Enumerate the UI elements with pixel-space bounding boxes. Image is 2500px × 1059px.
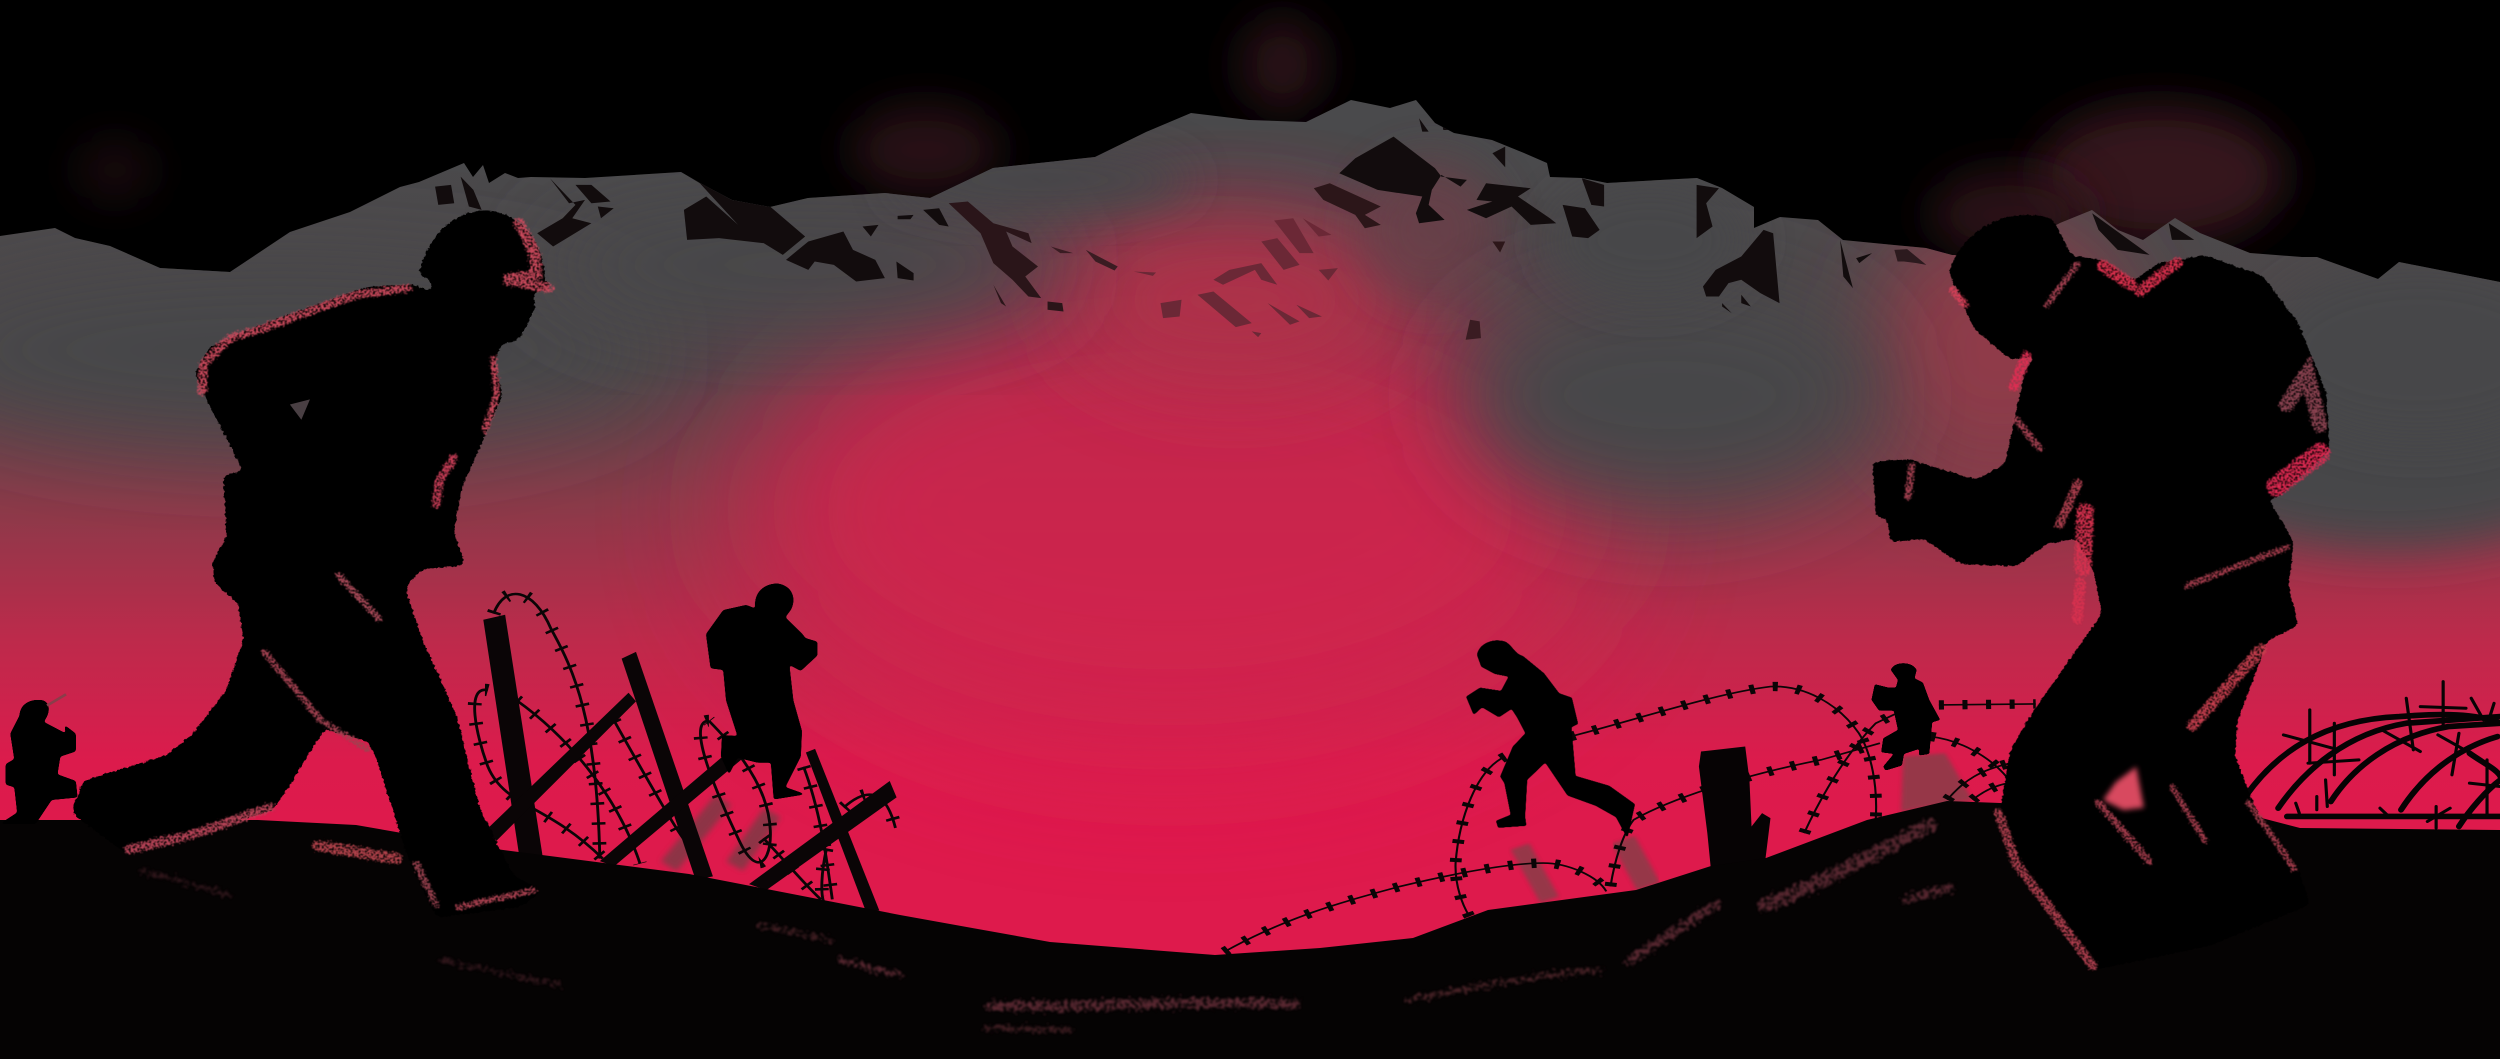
wooden stakes [483, 615, 897, 911]
rim light on the edges [1908, 263, 2320, 966]
small kneeling soldier, far left [0, 694, 77, 824]
pink gap between the legs [2103, 767, 2144, 810]
dark red patches on the central slope [1134, 218, 1338, 337]
wire coils [475, 594, 895, 902]
small running soldier, centre right [1466, 640, 1635, 838]
red glow in centre [740, 270, 1600, 750]
body silhouette [1872, 215, 2329, 970]
dark rock patches on the peaks, east [1314, 118, 2194, 340]
large soldier with backpack, right [1872, 215, 2329, 970]
dark clouds above the mountains [77, 17, 2285, 260]
body silhouette [72, 211, 554, 917]
barbed wire strands, centre right [1224, 686, 2036, 952]
small crouching soldier, right [1872, 663, 1940, 771]
shadows beneath the wire [669, 800, 772, 866]
large running soldier, left [72, 211, 554, 917]
landing dust clouds [1520, 753, 1973, 900]
small soldier jumping over wire, left [706, 584, 817, 799]
barbed wire obstacle, left [475, 594, 897, 911]
dark rock patches on the peaks, west [435, 172, 1118, 311]
ground [0, 801, 2500, 1059]
barbed wire coils, far right [2247, 682, 2500, 828]
grey cloud banks [0, 150, 2500, 550]
upper red haze [1065, 160, 2130, 480]
gap between arm and torso [290, 399, 310, 420]
rim light on the edges [129, 223, 548, 907]
ground highlights [140, 825, 1950, 1030]
distant fence post [1699, 747, 1770, 940]
